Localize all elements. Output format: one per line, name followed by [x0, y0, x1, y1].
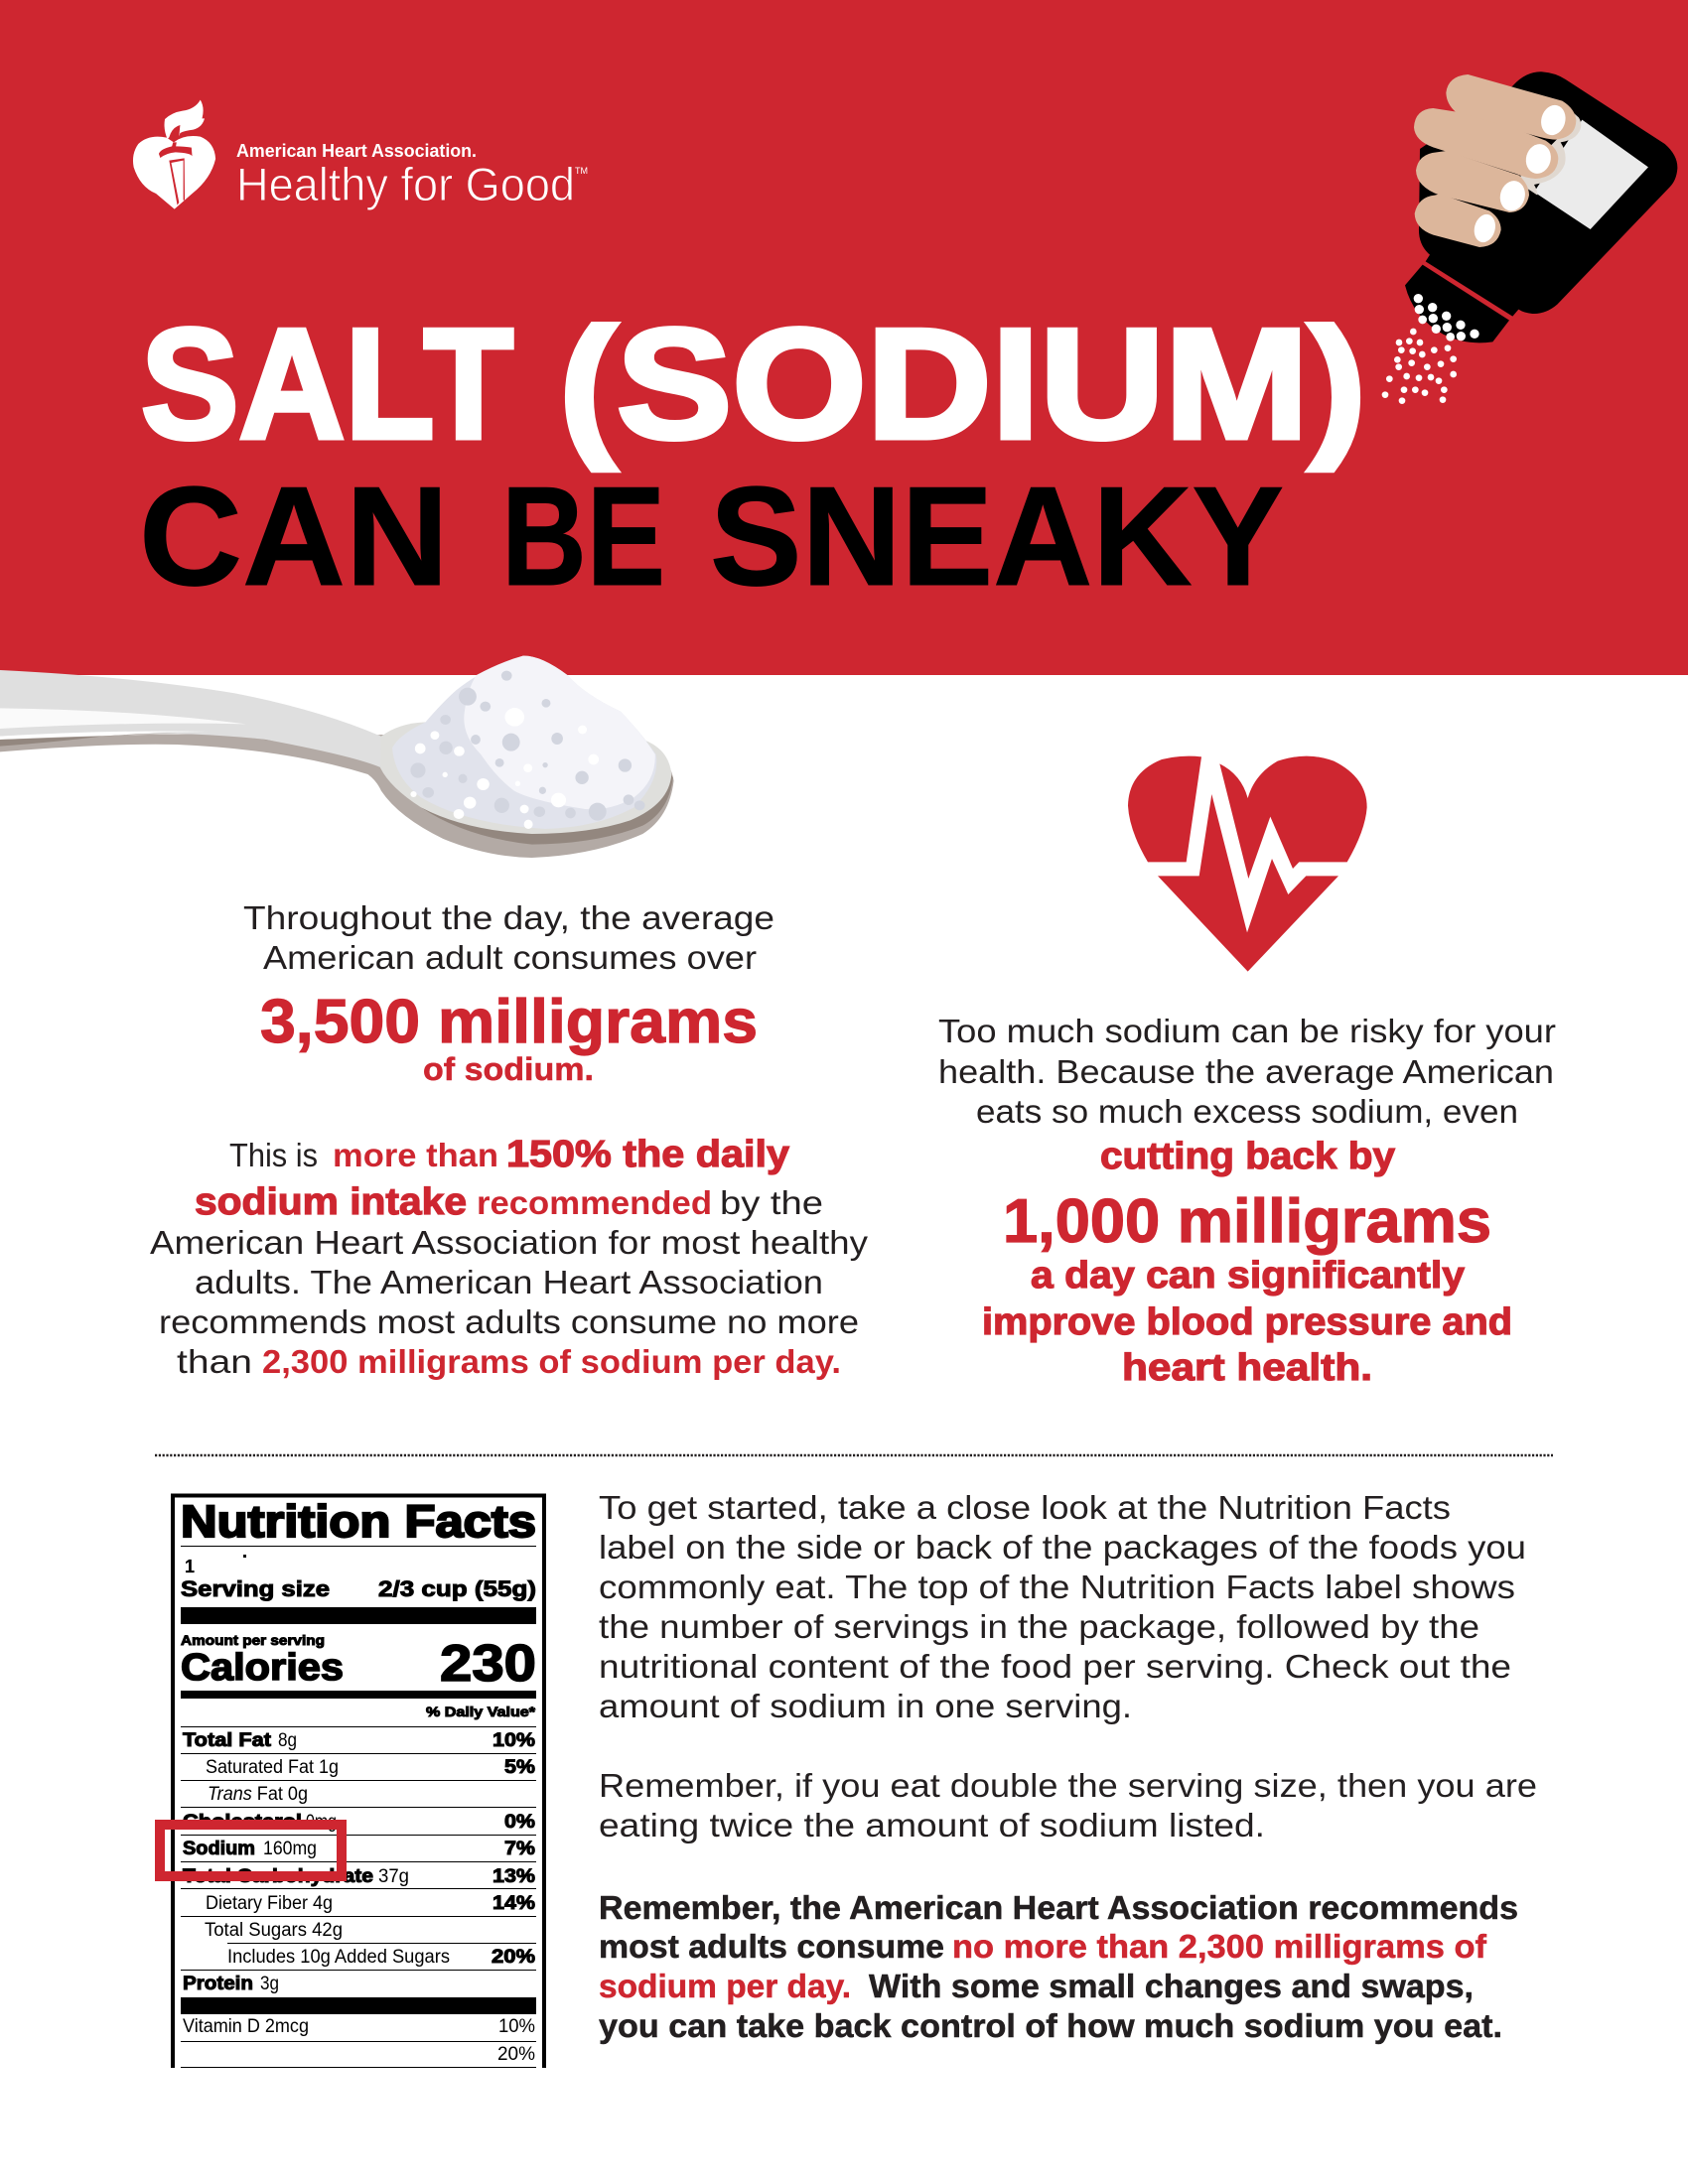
nutrient rows: 7% — [504, 1839, 535, 1859]
nutrient rows: 20% — [497, 2044, 535, 2065]
icon: hand shaking salt shaker — [1382, 71, 1677, 404]
right text block: cutting back: Too much sodium can be risky for your — [938, 1013, 1556, 1049]
icon: heart and torch — [133, 100, 215, 209]
nutrient rows: Total Fat — [183, 1730, 272, 1751]
recommendation callout: most adults consume — [599, 1928, 944, 1965]
nutrient rows: Dietary Fiber 4g — [206, 1893, 333, 1914]
title line 1: (SODIUM) — [559, 297, 1366, 472]
bowl rim — [380, 722, 671, 834]
left text block: average consumption: by the — [720, 1184, 823, 1221]
bottom text block: reading labels — [599, 1489, 1537, 2044]
left text block: average consumption: This is — [229, 1137, 318, 1173]
organization name: American Heart Association. — [236, 141, 477, 161]
falling salt — [1382, 329, 1457, 404]
nutrient rows: 10% — [498, 2016, 535, 2037]
recommendation callout — [599, 1889, 1518, 2044]
header band — [0, 0, 1688, 675]
left text block: average consumption: 150% the daily — [506, 1134, 789, 1175]
left text block: average consumption: recommends most adults consume no more — [159, 1303, 859, 1340]
shaker holes — [1414, 294, 1479, 341]
left text block: average consumption: Throughout the day, the average — [243, 899, 774, 936]
nutrient rows: Cholesterol — [183, 1812, 302, 1833]
nutrient rows: Saturated Fat 1g — [206, 1757, 339, 1778]
recommendation callout: you can take back control of how much sodium you eat. — [599, 2007, 1502, 2044]
nutrition facts label — [160, 1495, 544, 2068]
nutrient rows: Includes 10g Added Sugars — [227, 1947, 450, 1968]
shaker cap — [1405, 265, 1509, 342]
bottom text block: reading labels: To get started, take a close look at the Nutrition Facts — [599, 1489, 1451, 1526]
recommendation callout: Remember, the American Heart Association recommends — [599, 1889, 1518, 1926]
right text block: cutting back — [938, 1013, 1556, 1389]
nutrition facts label: 1 — [185, 1557, 195, 1576]
bottom text block: reading labels: the number of servings in the package, followed by the — [599, 1608, 1479, 1645]
bottom text block: reading labels: Remember, if you eat double the serving size, then you are — [599, 1767, 1537, 1804]
title line 2: SNEAKY — [710, 458, 1284, 615]
right text block: cutting back: health. Because the average American — [938, 1053, 1554, 1090]
salt grains: white — [410, 708, 599, 829]
left text block: average consumption: than — [177, 1343, 252, 1380]
left text block: average consumption: recommended — [477, 1184, 712, 1221]
salt highlight — [464, 656, 655, 809]
left text block: average consumption: more than — [333, 1137, 498, 1173]
recommendation callout: sodium per day. — [599, 1968, 851, 2004]
right text block: cutting back: a day can significantly — [1031, 1255, 1465, 1297]
handle white edge — [0, 732, 209, 739]
nutrient rows: 8g — [278, 1730, 297, 1751]
title line 2: CAN — [139, 458, 449, 615]
bottom text block: reading labels: eating twice the amount of sodium listed. — [599, 1807, 1265, 1843]
recommendation callout: no more than 2,300 milligrams of — [952, 1928, 1487, 1965]
icon: spoon heaped with salt — [0, 656, 674, 858]
nutrient rows: 0mg — [306, 1812, 337, 1833]
bottom text block: reading labels: commonly eat. The top of the Nutrition Facts label shows — [599, 1569, 1515, 1605]
handle highlight — [0, 708, 246, 729]
nutrient rows: Vitamin D 2mcg — [183, 2016, 309, 2037]
bottom text block: reading labels: nutritional content of the food per serving. Check out the — [599, 1648, 1511, 1685]
nutrition facts label: % Daily Value* — [426, 1704, 536, 1719]
nutrient rows — [183, 1730, 535, 2065]
sodium highlight box — [160, 1825, 342, 1876]
nutrient rows: 3g — [260, 1974, 279, 1994]
nutrient rows: Protein — [183, 1974, 253, 1994]
finger shadow — [1516, 106, 1581, 196]
shaker label — [1534, 120, 1648, 229]
program name: Healthy for Good — [236, 158, 575, 210]
nutrition facts label: 230 — [440, 1635, 536, 1693]
fingernails — [1472, 102, 1569, 245]
shaker body — [1419, 71, 1677, 317]
icon: heart with pulse line — [1128, 756, 1367, 972]
right text block: cutting back: cutting back by — [1100, 1136, 1395, 1177]
left text block: average consumption: sodium intake — [195, 1181, 467, 1223]
nutrient rows: Total Carbohydrate — [183, 1866, 373, 1887]
title — [139, 297, 1366, 615]
salt mound — [392, 656, 656, 829]
label heading: Nutrition Facts — [181, 1496, 536, 1547]
label frame — [173, 1495, 544, 2068]
bottom text block: reading labels: amount of sodium in one serving. — [599, 1688, 1132, 1724]
spoon underside — [0, 734, 674, 858]
right text block: cutting back: improve blood pressure and — [982, 1301, 1512, 1343]
recommendation callout: With some small changes and swaps, — [869, 1968, 1474, 2004]
nutrition facts label: Calories — [181, 1647, 344, 1689]
right text block: cutting back: eats so much excess sodium, even — [976, 1093, 1518, 1130]
calories: Amount per serving — [181, 1632, 325, 1648]
big number: 1,000 milligrams: 1,000 milligrams — [1003, 1187, 1491, 1256]
fingers — [1414, 74, 1576, 247]
spoon handle — [0, 670, 399, 767]
left text block: average consumption — [150, 899, 869, 1380]
nutrient rows: 14% — [492, 1893, 535, 1914]
nutrient rows: 0% — [504, 1812, 535, 1833]
title line 1 — [141, 297, 1366, 472]
nutrient rows: 13% — [492, 1866, 535, 1887]
nutrient rows: Total Sugars 42g — [205, 1920, 343, 1941]
big number: 3,500 milligrams: 3,500 milligrams — [260, 988, 758, 1056]
nutrient rows: 160mg — [263, 1839, 317, 1859]
bottom text block: reading labels: label on the side or back of the packages of the foods you — [599, 1529, 1526, 1566]
title line 2 — [139, 458, 1284, 615]
right text block: cutting back: heart health. — [1122, 1347, 1372, 1389]
nutrient rows: 37g — [378, 1866, 409, 1887]
left text block: average consumption: American adult consumes over — [263, 939, 757, 976]
left text block: average consumption: adults. The American Heart Association — [195, 1264, 823, 1300]
sodium row: Sodium — [183, 1839, 255, 1859]
spoon shadow edge — [0, 734, 673, 845]
serving size: Serving size — [181, 1576, 330, 1601]
left text block: average consumption: of sodium. — [423, 1051, 594, 1087]
nutrient rows: 5% — [504, 1757, 535, 1778]
nutrient rows: 20% — [492, 1947, 535, 1968]
logo: American Heart Association Healthy for Good — [133, 100, 588, 210]
trademark: TM — [575, 166, 588, 176]
title line 2: BE — [501, 458, 665, 615]
thick bars — [181, 1607, 536, 2014]
title line 1: SALT — [141, 297, 513, 472]
salt grains: grey — [410, 671, 645, 821]
nutrition facts label: 2/3 cup (55g) — [378, 1576, 536, 1601]
nutrient rows: Trans Fat 0g — [208, 1784, 308, 1805]
nutrient rows: 10% — [492, 1730, 535, 1751]
left text block: average consumption: 2,300 milligrams of sodium per day. — [262, 1343, 841, 1380]
left text block: average consumption: American Heart Association for most healthy — [150, 1224, 869, 1261]
